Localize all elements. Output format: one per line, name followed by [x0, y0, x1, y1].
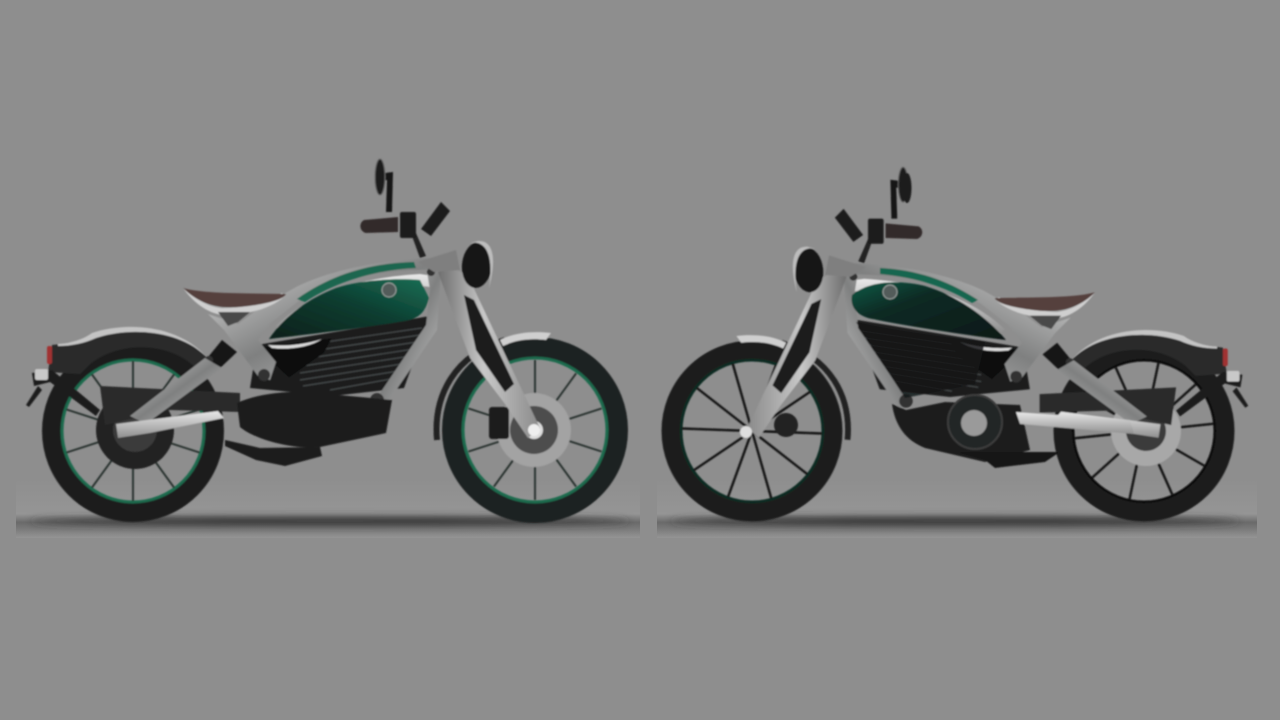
mirror	[375, 159, 385, 195]
swingarm lower arm	[116, 411, 224, 438]
frame tank rim	[276, 274, 436, 330]
tail light	[47, 346, 52, 364]
ground shadow: right	[670, 517, 1240, 525]
master cylinder and controls	[400, 212, 416, 238]
front wheel	[452, 347, 618, 513]
motor centre cap	[961, 410, 987, 436]
front fender top	[500, 332, 551, 346]
front axle	[740, 426, 752, 438]
shared chassis: fender, frame, swingarm, fork, seat, bars	[26, 159, 551, 440]
side panel	[263, 338, 332, 378]
battery fin block	[250, 316, 430, 396]
fuel tank	[852, 268, 1006, 340]
footpeg assembly	[225, 440, 322, 466]
fork	[438, 268, 540, 438]
second mirror	[902, 173, 912, 203]
tail marker	[35, 369, 48, 380]
seat	[183, 288, 286, 307]
cooling fins	[300, 328, 422, 390]
rear number plate bracket	[26, 370, 100, 416]
swingarm	[130, 358, 222, 424]
main frame	[208, 258, 440, 380]
swingarm link	[1016, 412, 1134, 434]
rear shock	[204, 340, 237, 372]
motor finned cover	[948, 395, 1002, 449]
belt arm	[100, 386, 240, 425]
ground shadow: left	[30, 517, 630, 525]
side panel highlight	[268, 339, 322, 349]
tank badge	[883, 285, 897, 299]
rear wheel	[52, 350, 214, 512]
front fender arc	[437, 340, 505, 440]
tank top stripe	[297, 262, 416, 302]
headlight	[460, 241, 494, 289]
footpeg assembly	[955, 452, 1060, 468]
handlebar stem	[408, 224, 426, 258]
tank badge	[382, 283, 396, 297]
motorcycle: left, green rims	[26, 159, 618, 513]
motor housing	[892, 402, 1030, 462]
floor strip: right	[657, 478, 1257, 538]
fork inner dark section	[464, 295, 514, 392]
shared chassis mirrored	[736, 167, 1248, 440]
rear fender highlight	[58, 327, 205, 355]
floor strip: left	[16, 478, 640, 538]
head bracket	[418, 250, 460, 272]
lever display	[421, 202, 450, 236]
mirror stem	[376, 172, 393, 212]
fuel tank	[269, 262, 429, 339]
grip	[360, 217, 398, 233]
motor case	[237, 392, 392, 448]
pivot bolts	[205, 268, 435, 407]
front wheel	[665, 342, 839, 520]
motorcycle: right, dark rims	[665, 167, 1248, 520]
subframe under seat	[218, 312, 250, 326]
rear fender	[48, 328, 207, 374]
tail sweep under seat	[183, 288, 285, 315]
rear wheel	[1063, 349, 1225, 513]
battery dark overlay	[856, 322, 985, 398]
tank top stripe	[880, 268, 978, 303]
front axle	[528, 424, 540, 436]
down tube	[374, 272, 441, 408]
